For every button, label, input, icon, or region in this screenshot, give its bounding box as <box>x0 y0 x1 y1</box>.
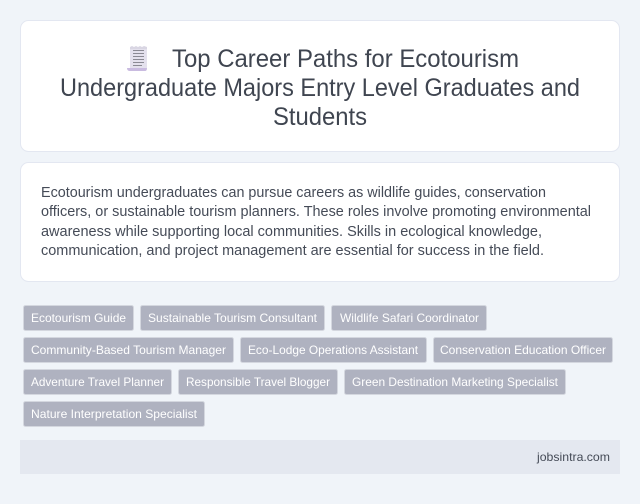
tag: Sustainable Tourism Consultant: Sustainable Tourism Consultant <box>148 311 318 325</box>
panel: title card <box>20 20 620 152</box>
tag: Wildlife Safari Coordinator <box>332 306 486 330</box>
title: Top Career Paths for Ecotourism <box>172 45 519 73</box>
footer source text: jobsintra.com <box>536 450 610 464</box>
tag: Eco-Lodge Operations Assistant <box>240 338 426 362</box>
tag: Conservation Education Officer <box>434 338 612 362</box>
tag: Conservation Education Officer: Conservation Education Officer <box>440 343 606 357</box>
tag: Community-Based Tourism Manager: Community-Based Tourism Manager <box>31 343 226 357</box>
tag: Green Destination Marketing Specialist <box>344 370 566 394</box>
icon: paper scroll <box>127 46 147 71</box>
tag: Responsible Travel Blogger: Responsible Travel Blogger <box>186 375 330 389</box>
tag: Ecotourism Guide <box>24 306 134 330</box>
tag: Eco-Lodge Operations Assistant: Eco-Lodge Operations Assistant <box>248 343 419 357</box>
tag: Wildlife Safari Coordinator: Wildlife Safari Coordinator <box>340 311 479 325</box>
footer bar <box>20 440 620 474</box>
tag: Sustainable Tourism Consultant <box>140 306 324 330</box>
tag: Ecotourism Guide: Ecotourism Guide <box>31 311 126 325</box>
tag: Nature Interpretation Specialist: Nature Interpretation Specialist <box>31 407 198 421</box>
description text: Ecotourism undergraduates can pursue careers as wildlife guides, conservation <box>41 185 546 201</box>
tag: Nature Interpretation Specialist <box>24 402 204 426</box>
tag: Responsible Travel Blogger <box>178 370 338 394</box>
description text: awareness while supporting local communities. Skills in ecological knowledge, <box>41 224 542 240</box>
title: Undergraduate Majors Entry Level Graduates and <box>60 74 580 102</box>
panel: description card <box>20 162 620 282</box>
tag: Community-Based Tourism Manager <box>24 338 234 362</box>
career tags <box>24 306 612 426</box>
title <box>60 45 580 131</box>
description text: communication, and project management are essential for success in the field. <box>41 243 544 259</box>
tag: Green Destination Marketing Specialist: Green Destination Marketing Specialist <box>352 375 559 389</box>
description text <box>41 185 591 259</box>
tag: Adventure Travel Planner <box>24 370 172 394</box>
description text: officers, or sustainable tourism planners. These roles involve promoting environmental <box>41 204 591 220</box>
tag: Adventure Travel Planner: Adventure Travel Planner <box>31 375 164 389</box>
title: Students <box>273 103 367 131</box>
